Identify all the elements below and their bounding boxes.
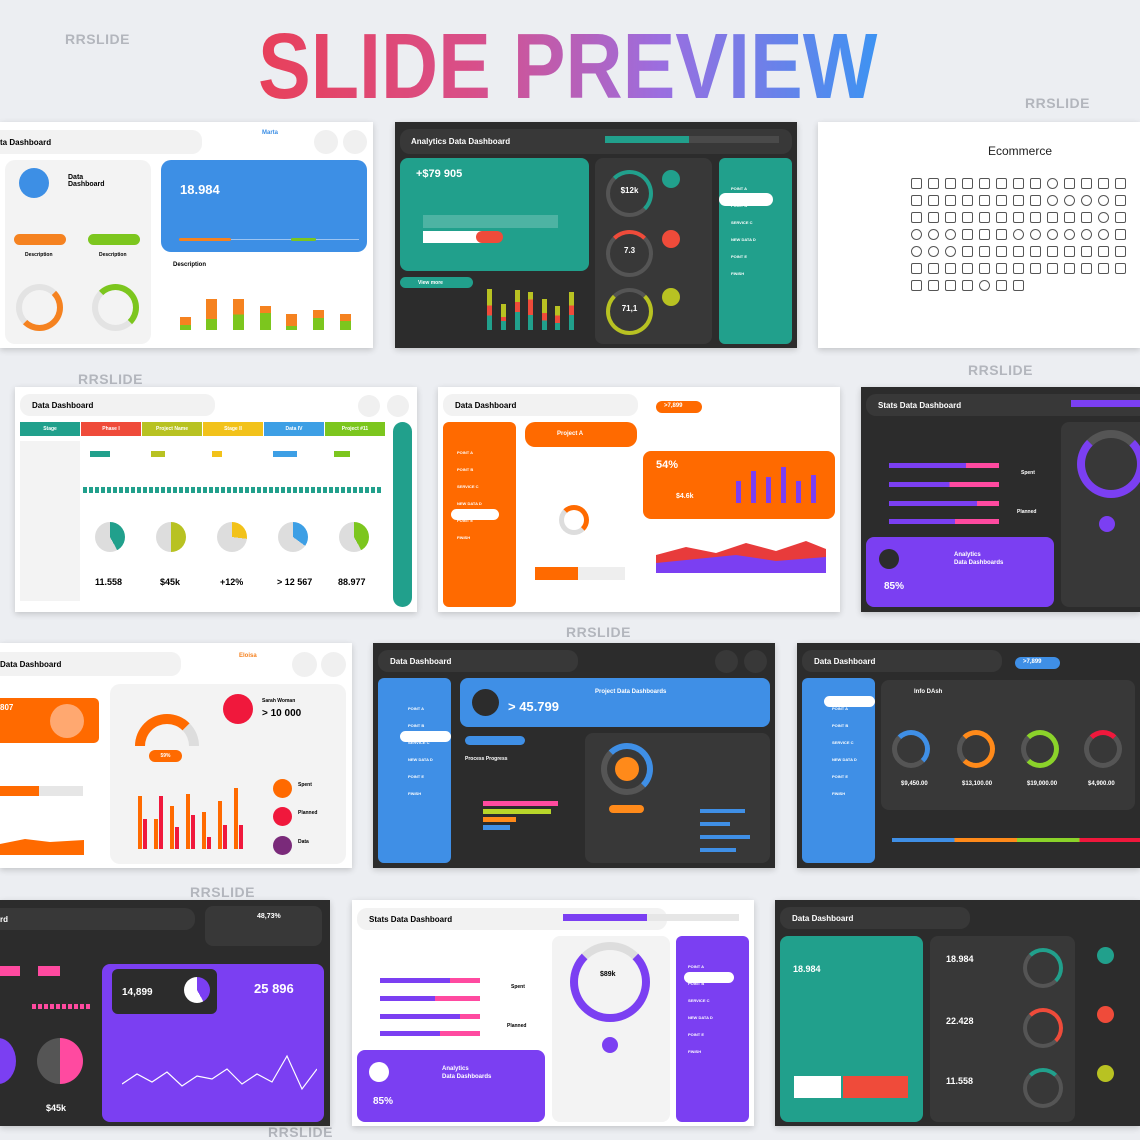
pies: [95, 522, 125, 552]
blue menu: NEW DATA D: [408, 757, 433, 762]
icon grid: [911, 178, 1126, 291]
gauge: [135, 714, 199, 746]
slide 10: purple dark: $45k: [46, 1103, 66, 1113]
header: Analytics Data Dashboard: [411, 137, 510, 146]
watermark: RRSLIDE: [1025, 95, 1090, 111]
slide 4: data dashboard table: [15, 387, 417, 612]
gray panel: 59%: [160, 753, 170, 759]
blue menu: [378, 678, 451, 863]
slide 4: data dashboard table: Data IV: [286, 426, 302, 432]
left panel: Dashboard: [68, 181, 105, 188]
orange card: $4.6k: [676, 493, 694, 500]
watermark: RRSLIDE: [65, 31, 130, 47]
blue menu: FINISH: [832, 791, 845, 796]
header: [0, 908, 195, 930]
slide 4: data dashboard table: Phase I: [102, 426, 120, 432]
gray panel: Sarah Woman: [262, 698, 295, 704]
slide 12: teal dark: [775, 900, 1140, 1126]
slide 4: data dashboard table: 88.977: [338, 577, 366, 587]
blue card: > 45.799: [508, 699, 559, 714]
header: [443, 394, 638, 416]
slide 8: project data dashboards blue dark: [373, 643, 775, 868]
slide 9: info dash rings dark: $4,900.00: [1088, 781, 1115, 787]
middle rings panel: 71,1: [622, 304, 637, 313]
slide 10: purple dark: 48,73%: [257, 913, 281, 920]
watermark: RRSLIDE: [78, 371, 143, 387]
slide 4: data dashboard table: Project #11: [342, 426, 368, 432]
left panel: [5, 160, 151, 344]
header: [400, 129, 792, 154]
purple panel: Data Dashboards: [954, 560, 1003, 566]
purple panel: Analytics: [954, 552, 981, 558]
middle panel: 22.428: [946, 1016, 974, 1026]
purple menu: POINT E: [688, 1032, 704, 1037]
left panel: Description: [99, 252, 127, 258]
header: Stats Data Dashboard: [878, 401, 961, 410]
purple menu: SERVICE C: [688, 998, 710, 1003]
slide 4: data dashboard table: > 12 567: [277, 577, 312, 587]
slide 7: eloisa orange dashboard: [0, 643, 352, 868]
area chart: [656, 541, 826, 573]
watermark: RRSLIDE: [566, 624, 631, 640]
slide 2: analytics data dashboard dark: [395, 122, 797, 348]
pink bars: [0, 966, 20, 976]
orange card: 54%: [656, 459, 678, 471]
gray panel: Planned: [298, 810, 317, 816]
purple card: [102, 964, 324, 1122]
orange menu: POINT A: [457, 450, 473, 455]
column tabs: Stage: [43, 426, 57, 432]
middle rings panel: [595, 158, 712, 344]
blue menu: FINISH: [408, 791, 421, 796]
slide 9: info dash rings dark: [797, 643, 1140, 868]
right teal menu: SERVICE C: [731, 220, 752, 225]
slide 1: data dashboard white: Marta: [262, 130, 278, 136]
side bar: [393, 422, 412, 607]
purple menu: NEW DATA D: [688, 1015, 713, 1020]
header: Data Dashboard: [32, 401, 93, 410]
blue menu: POINT E: [408, 774, 424, 779]
slide 5: orange data dashboard: >7,899: [664, 403, 683, 409]
header: [0, 652, 181, 676]
slide 11: stats data dashboard white: Planned: [507, 1023, 526, 1029]
blue menu: NEW DATA D: [832, 757, 857, 762]
right panel: [585, 733, 770, 863]
middle panel: 18.984: [946, 954, 974, 964]
bars: [138, 788, 243, 849]
orange menu: POINT B: [457, 467, 473, 472]
view more: [400, 277, 473, 288]
numbers: 11.558: [95, 577, 122, 587]
view more: View more: [418, 280, 443, 286]
purple card: 25 896: [254, 981, 294, 996]
slide 4: data dashboard table: +12%: [220, 577, 243, 587]
header: [802, 650, 1002, 672]
purple panel: 85%: [373, 1096, 393, 1107]
left panel: Description: [25, 252, 53, 258]
purple panel: [866, 537, 1054, 607]
blue menu: SERVICE C: [408, 740, 430, 745]
header: Stats Data Dashboard: [369, 915, 452, 924]
right teal menu: POINT A: [731, 186, 747, 191]
purple card: 14,899: [122, 987, 153, 998]
right teal menu: POINT E: [731, 254, 747, 259]
donut: [559, 505, 589, 535]
purple panel: 85%: [884, 581, 904, 592]
purple panel: Analytics: [442, 1066, 469, 1072]
header: [0, 130, 202, 154]
header: [378, 650, 578, 672]
header: Data Dashboard: [0, 660, 61, 669]
right teal menu: POINT B: [731, 203, 747, 208]
slide 9: info dash rings dark: $19,000.00: [1027, 781, 1057, 787]
project pill: Project A: [557, 431, 583, 437]
ring panel: [552, 936, 670, 1122]
gray panel: Data: [298, 839, 309, 845]
middle rings panel: $12k: [621, 186, 638, 195]
right teal menu: NEW DATA D: [731, 237, 756, 242]
orange menu: FINISH: [457, 535, 470, 540]
rings: [892, 730, 930, 768]
blue card: Project Data Dashboards: [595, 689, 666, 695]
orange card: [0, 698, 99, 743]
watermark: RRSLIDE: [268, 1124, 333, 1140]
orange menu: SERVICE C: [457, 484, 478, 489]
slide 4: data dashboard table: $45k: [160, 577, 180, 587]
slide 1: data dashboard white: Description: [173, 262, 206, 268]
bar chart: [180, 299, 351, 330]
header: [780, 907, 970, 929]
header: Data Dashboard: [455, 401, 516, 410]
title: SLIDE PREVIEW: [258, 14, 877, 118]
purple menu: POINT B: [688, 981, 704, 986]
header: Data Dashboard: [792, 914, 853, 923]
teal card: [780, 936, 923, 1122]
blue card: [161, 160, 367, 252]
blue menu: POINT E: [832, 774, 848, 779]
purple panel: Data Dashboards: [442, 1074, 491, 1080]
ring panel: $89k: [600, 971, 616, 978]
purple menu: [676, 936, 749, 1122]
slide 7: eloisa orange dashboard: Eloisa: [239, 653, 257, 659]
blue menu: SERVICE C: [832, 740, 854, 745]
slide 5: orange data dashboard: [438, 387, 840, 612]
gray panel: > 10 000: [262, 708, 301, 719]
purple menu: FINISH: [688, 1049, 701, 1054]
purple menu: POINT A: [688, 964, 704, 969]
middle panel: [930, 936, 1075, 1122]
stacked bars: [487, 289, 574, 330]
slide 9: info dash rings dark: $9,450.00: [901, 781, 928, 787]
heading: Ecommerce: [988, 144, 1052, 158]
slide 9: info dash rings dark: $13,100.00: [962, 781, 992, 787]
column tabs: [20, 422, 80, 436]
blue card: [460, 678, 770, 727]
right teal menu: FINISH: [731, 271, 744, 276]
watermark: RRSLIDE: [968, 362, 1033, 378]
orange card: 807: [0, 703, 13, 712]
orange card: [643, 451, 835, 519]
teal card: +$79 905: [416, 168, 462, 180]
slide 4: data dashboard table: Project Name: [156, 426, 188, 432]
teal card: [400, 158, 589, 271]
slide 3: ecommerce icons: [818, 122, 1140, 348]
header: [866, 394, 1140, 416]
slide 8: project data dashboards blue dark: Process Progress: [465, 756, 508, 762]
bottom stripe: [892, 838, 1140, 842]
purple panel: [357, 1050, 545, 1122]
slide 9: info dash rings dark: >7,899: [1023, 659, 1042, 665]
right teal menu: [719, 158, 792, 344]
left panel: Data: [68, 174, 83, 181]
blue menu: POINT B: [832, 723, 848, 728]
progress bars: [465, 736, 525, 745]
blue menu: POINT B: [408, 723, 424, 728]
watermark: RRSLIDE: [190, 884, 255, 900]
slide 11: stats data dashboard white: Spent: [511, 984, 525, 990]
blue menu: POINT A: [408, 706, 424, 711]
gray panel: [110, 684, 346, 864]
orange menu: NEW DATA D: [457, 501, 482, 506]
header: [357, 908, 667, 930]
middle panel: 11.558: [946, 1076, 973, 1086]
gray panel: Spent: [298, 782, 312, 788]
slide 10: purple dark: [0, 900, 330, 1126]
slide 6: stats data dashboard dark: Planned: [1017, 509, 1036, 515]
header: Data Dashboard: [390, 657, 451, 666]
orange menu: [443, 422, 516, 607]
pie: [37, 1038, 83, 1084]
bars: [889, 463, 999, 468]
project pill: [525, 422, 637, 447]
bars: [380, 978, 480, 983]
header: [20, 394, 215, 416]
completed bar: [535, 567, 625, 580]
slide 4: data dashboard table: Stage II: [224, 426, 242, 432]
blue menu: POINT A: [832, 706, 848, 711]
teal card: 18.984: [793, 964, 821, 974]
header: ta Dashboard: [0, 138, 51, 147]
header: Data Dashboard: [814, 657, 875, 666]
slide 6: stats data dashboard dark: [861, 387, 1140, 612]
slide 11: stats data dashboard white: [352, 900, 754, 1126]
slide 9: info dash rings dark: Info DAsh: [914, 689, 942, 695]
slide 1: data dashboard white: [0, 122, 373, 348]
blue card: 18.984: [180, 182, 220, 197]
middle rings panel: 7.3: [624, 246, 635, 255]
rows: [20, 441, 80, 601]
orange menu: POINT E: [457, 518, 473, 523]
slide 6: stats data dashboard dark: Spent: [1021, 470, 1035, 476]
blue menu: [802, 678, 875, 863]
header: rd: [0, 915, 8, 924]
right panel ring: [1061, 422, 1140, 607]
